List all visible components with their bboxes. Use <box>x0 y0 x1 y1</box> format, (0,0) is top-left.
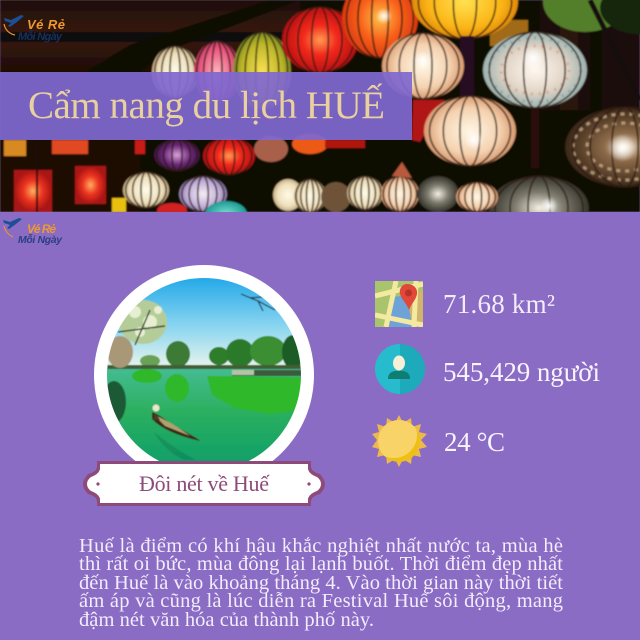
icon: sun <box>371 412 427 467</box>
river water <box>107 368 301 461</box>
temperature value: 24 °C <box>444 427 505 457</box>
title banner <box>0 72 412 140</box>
population value: 545,429 người <box>443 357 600 387</box>
description paragraph: thì rất oi bức, mùa đông lại lạnh buốt. Thời điểm đẹp nhất <box>79 553 563 575</box>
left bank shrubs <box>108 380 126 422</box>
logo: below header: Mỗi Ngày <box>18 233 63 246</box>
area value: 71.68 km² <box>443 289 555 319</box>
description paragraph: ấm áp và cũng là lúc diễn ra Festival Huế sôi động, mang <box>79 590 563 612</box>
tree reflections <box>132 369 302 414</box>
boat <box>152 404 200 460</box>
logo: top: Vé Rẻ <box>27 17 65 32</box>
logo: top <box>4 15 65 43</box>
description paragraph: đến Huế là vào khoảng tháng 4. Vào thời gian này thời tiết <box>79 572 563 594</box>
title: Cẩm nang du lịch HUẾ <box>28 82 385 127</box>
flowering tree <box>107 300 167 368</box>
icon: plane small <box>3 218 22 229</box>
plaque text: Đôi nét về Huế <box>139 471 270 496</box>
icon: person <box>375 344 425 394</box>
circular photo: Hue river <box>94 265 314 461</box>
label plaque <box>83 461 325 506</box>
logo: below header <box>3 218 63 246</box>
stat: population <box>375 344 600 394</box>
distant trees <box>107 335 304 369</box>
description paragraph: Huế là điểm có khí hậu khắc nghiệt nhất nước ta, mùa hè <box>79 535 563 557</box>
description paragraph: đậm nét văn hóa của thành phố này. <box>79 609 374 631</box>
sky <box>107 278 301 368</box>
stat: temperature <box>371 412 505 467</box>
icon: plane <box>4 15 24 27</box>
logo: below header: Vé Rẻ <box>27 222 56 236</box>
description paragraph <box>79 535 563 631</box>
header photo: lanterns <box>0 0 640 212</box>
bare branch <box>241 294 275 311</box>
stat: area <box>375 281 555 327</box>
logo: top: Mỗi Ngày <box>18 30 63 43</box>
icon: map <box>375 281 423 327</box>
